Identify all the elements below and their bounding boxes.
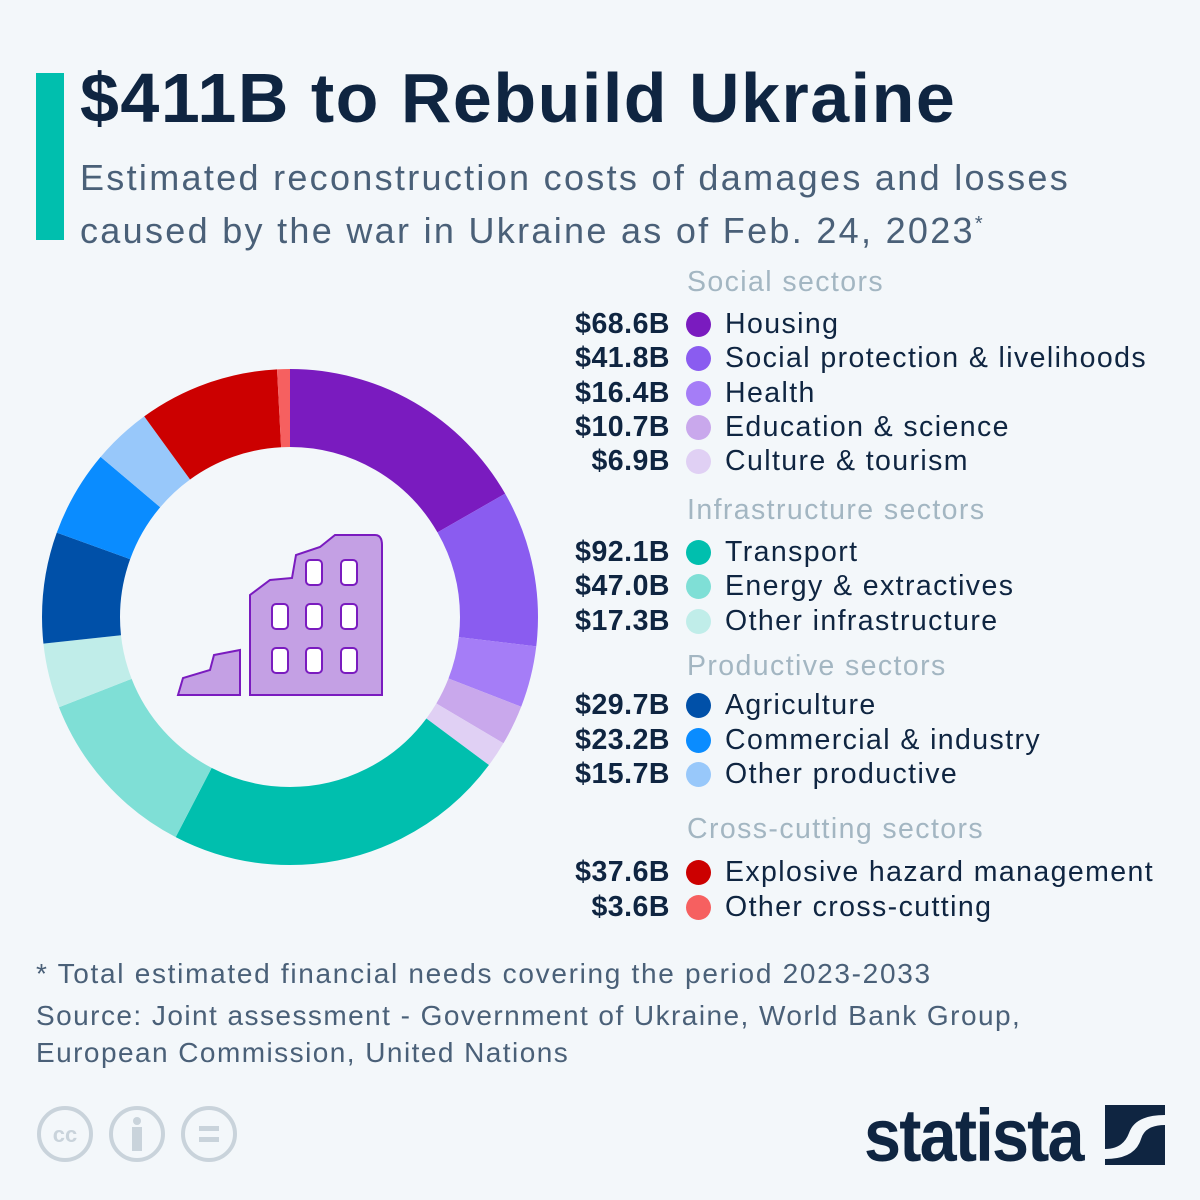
license icons: cc (53, 1122, 77, 1147)
heading: infrastructure: Infrastructure sectors (687, 494, 985, 526)
legend: $15.7B (575, 758, 670, 790)
legend: $16.4B (575, 377, 670, 409)
accent bar (36, 73, 64, 240)
legend: $68.6B (575, 308, 670, 340)
legend: Transport (725, 536, 859, 568)
footnote and source: * Total estimated financial needs covering the period 2023-2033 (36, 958, 932, 989)
legend: Explosive hazard management (725, 856, 1154, 888)
heading: cross-cutting: Cross-cutting sectors (687, 813, 984, 845)
legend: $41.8B (575, 342, 670, 374)
legend: $47.0B (575, 570, 670, 602)
legend: $10.7B (575, 411, 670, 443)
legend (575, 266, 1154, 923)
icon: damaged building (176, 534, 383, 696)
legend: $92.1B (575, 536, 670, 568)
legend: Other cross-cutting (725, 891, 992, 923)
heading: productive: Productive sectors (687, 650, 947, 682)
legend: $17.3B (575, 605, 670, 637)
legend: $23.2B (575, 724, 670, 756)
title: $411B to Rebuild Ukraine (80, 59, 956, 137)
legend: Commercial & industry (725, 724, 1041, 756)
legend: Other infrastructure (725, 605, 999, 637)
subtitle: Estimated reconstruction costs of damages and losses (80, 157, 1070, 198)
legend: $3.6B (591, 891, 670, 923)
footnote and source: European Commission, United Nations (36, 1037, 569, 1068)
footnote and source: Source: Joint assessment - Government of Ukraine, World Bank Group, (36, 1000, 1021, 1031)
legend: Housing (725, 308, 839, 340)
donut chart (42, 369, 538, 865)
footnote and source (36, 958, 1021, 1068)
legend: Social protection & livelihoods (725, 342, 1147, 374)
legend: Agriculture (725, 689, 877, 721)
legend: $29.7B (575, 689, 670, 721)
subtitle: caused by the war in Ukraine as of Feb. 24, 2023* (80, 210, 985, 251)
heading: social: Social sectors (687, 266, 884, 298)
legend: Other productive (725, 758, 958, 790)
legend: Education & science (725, 411, 1010, 443)
statista logo: statista (864, 1094, 1083, 1177)
legend: Culture & tourism (725, 445, 969, 477)
subtitle (80, 157, 1070, 251)
license icons (37, 1106, 237, 1162)
legend: $37.6B (575, 856, 670, 888)
legend: $6.9B (591, 445, 670, 477)
legend: Energy & extractives (725, 570, 1014, 602)
legend: Health (725, 377, 816, 409)
